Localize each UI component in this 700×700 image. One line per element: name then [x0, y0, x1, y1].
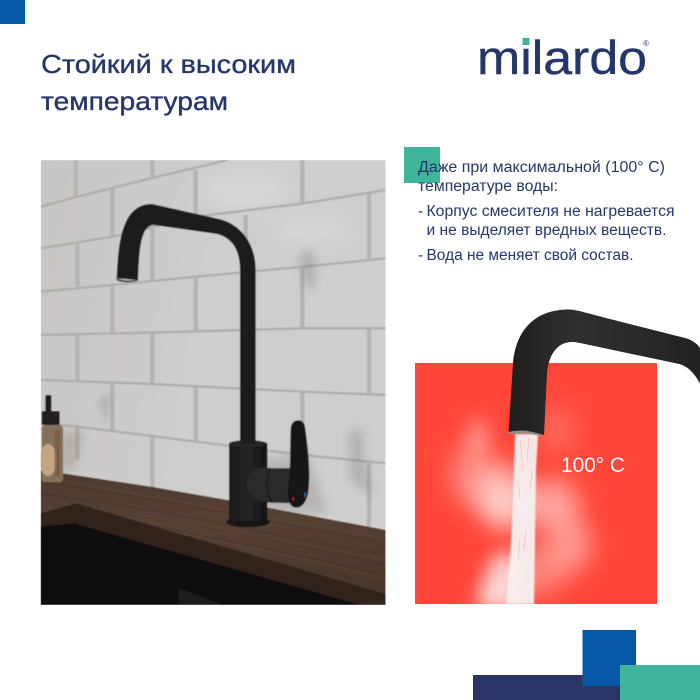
text block: description	[418, 159, 674, 264]
title: Стойкий к высоким	[41, 49, 296, 79]
water stream	[506, 434, 538, 604]
text block: description: Вода не меняет свой состав.	[426, 247, 634, 264]
title	[41, 49, 296, 116]
teal square behind intro text	[404, 147, 440, 183]
red panel: hot water	[415, 363, 657, 614]
title: температурам	[41, 86, 228, 116]
logo: milardo: ®	[643, 39, 649, 48]
faucet	[117, 204, 309, 527]
text block: description: Корпус смесителя не нагревается	[426, 203, 674, 220]
steam cloud	[450, 404, 592, 614]
text block: description: Даже при максимальной (100° С)	[418, 159, 665, 176]
wooden worktop	[41, 470, 386, 605]
temperature label: 100° C	[561, 454, 625, 477]
corner square: top left	[0, 0, 25, 24]
tiled wall	[41, 160, 386, 543]
text block: description: и не выделяет вредных веществ.	[426, 222, 666, 239]
text block: description: -	[418, 247, 423, 264]
photo: kitchen faucet on tiled wall	[39, 160, 386, 605]
footer blocks	[473, 630, 700, 700]
jar	[39, 395, 63, 482]
text block: description: температуре воды:	[418, 178, 558, 195]
faucet spout close-up	[508, 309, 700, 436]
shadows on wall	[57, 251, 374, 513]
text block: description: -	[418, 203, 423, 220]
sink	[41, 503, 386, 605]
logo: milardo: milardo	[477, 31, 647, 84]
